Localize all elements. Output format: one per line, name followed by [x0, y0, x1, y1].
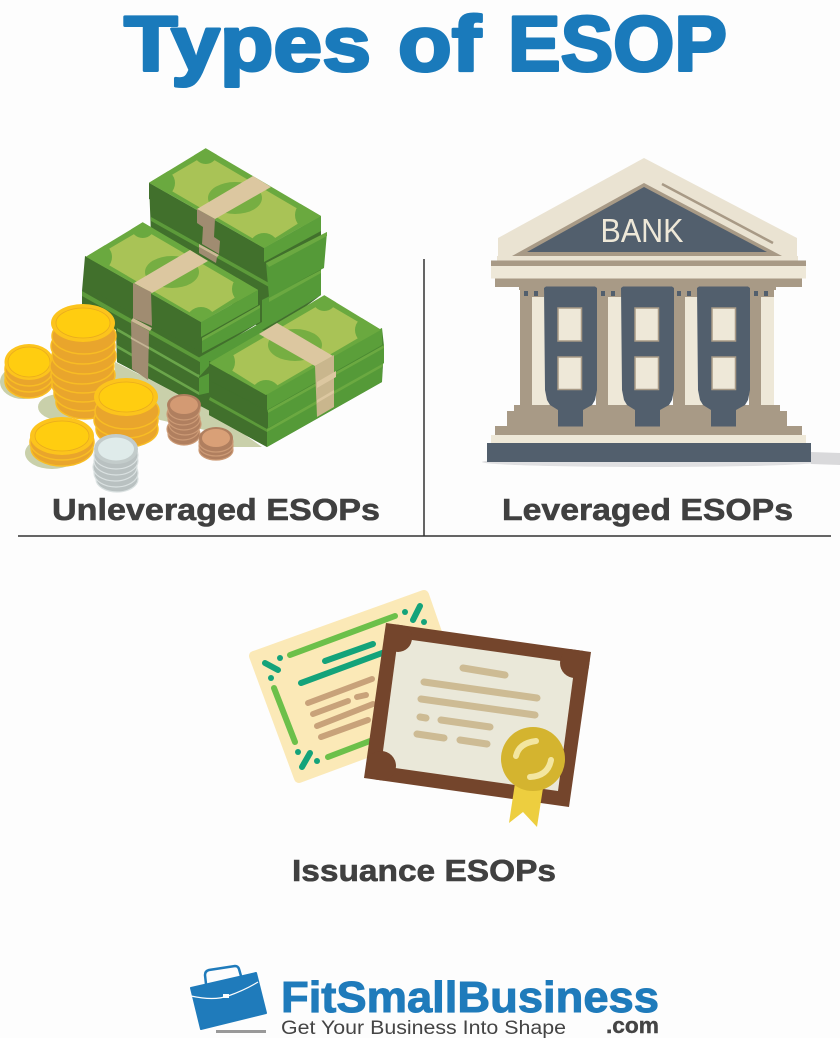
columns: [520, 286, 574, 411]
panel: issuance ESOPs illustration (certificates): [254, 595, 591, 827]
label: issuance: Issuance ESOPs: [292, 853, 556, 888]
icon: silver coins: [93, 434, 138, 492]
icon: front stack of bills: [205, 287, 384, 447]
left stack: [4, 344, 54, 398]
icon: copper coins: [167, 394, 233, 460]
.com: .com: [606, 1013, 659, 1038]
front stack: [30, 417, 94, 466]
wordmark: FitSmallBusiness: [281, 973, 659, 1022]
logo: Fit Small Business: [191, 966, 659, 1038]
icon: back stack of bills: [147, 140, 327, 330]
icon: middle stack of bills: [82, 214, 321, 412]
right stack: [94, 378, 159, 447]
tall stack: [50, 304, 116, 419]
dividers: [18, 259, 831, 536]
label: leveraged: Leveraged ESOPs: [502, 492, 793, 527]
icon: briefcase: [191, 966, 266, 1033]
icon: gold coins: [4, 304, 159, 466]
shadow: [482, 457, 818, 467]
bank sign text: BANK: [600, 212, 684, 249]
bank door panels: [544, 286, 750, 426]
panel: unleveraged ESOPs illustration: [0, 140, 384, 492]
title: [124, 0, 727, 88]
panel: leveraged ESOPs illustration (bank): [482, 158, 840, 467]
entablature: [497, 256, 798, 261]
ground shadows: [0, 362, 262, 469]
label: unleveraged: Unleveraged ESOPs: [52, 492, 380, 527]
title: ESOP: [508, 0, 727, 88]
windows: [558, 308, 736, 390]
ribbon seal: [501, 727, 565, 827]
title: Types: [124, 0, 371, 88]
pediment: [498, 158, 797, 258]
front certificate frame: [364, 623, 591, 807]
steps: [514, 405, 780, 411]
back certificate: [254, 595, 466, 778]
title: of: [398, 0, 482, 88]
